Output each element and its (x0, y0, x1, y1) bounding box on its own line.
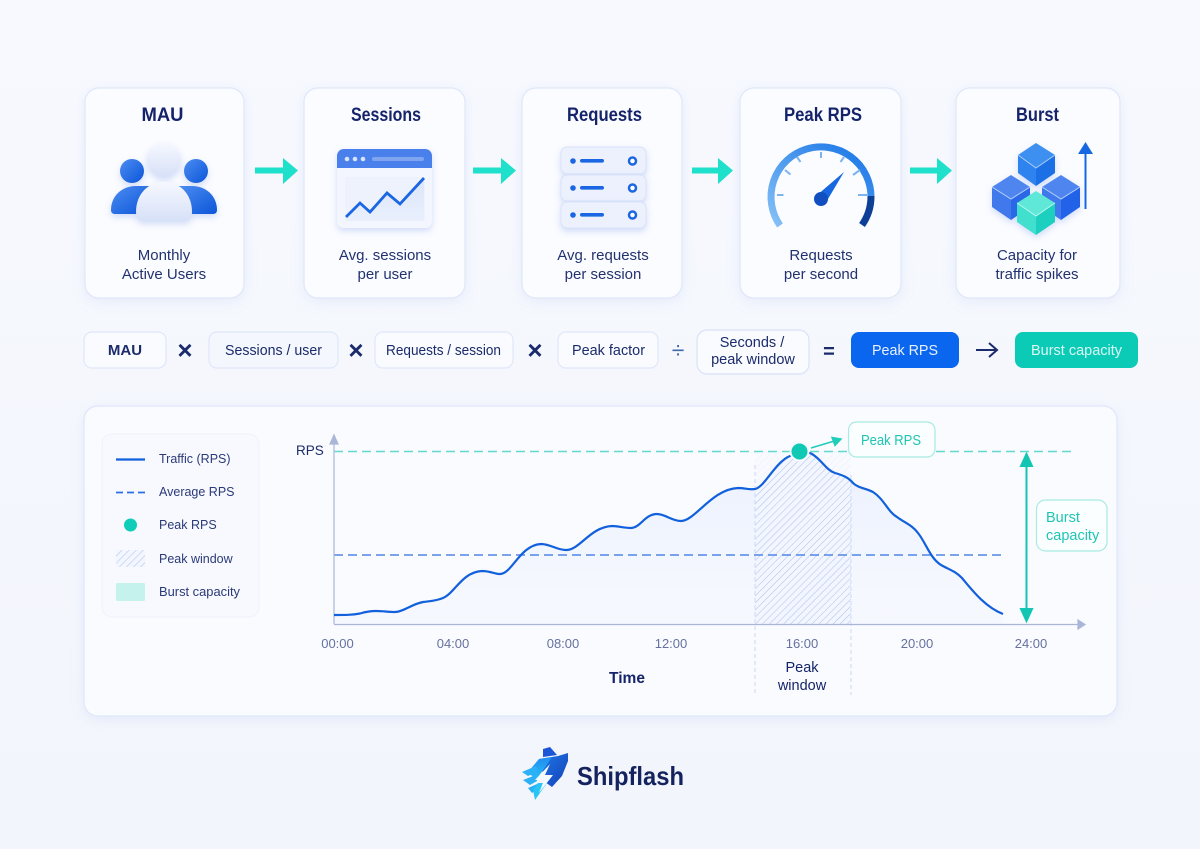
arrow: peak RPS to burst (910, 158, 952, 184)
chart: traffic over time (296, 422, 1107, 695)
legend (102, 434, 259, 617)
pill: burst capacity result: Burst capacity (1031, 342, 1122, 359)
callout: burst capacity: capacity (1046, 528, 1100, 544)
x tick labels: 20:00 (901, 636, 933, 651)
pill: burst capacity result (1015, 332, 1138, 368)
callout: peak RPS (848, 422, 935, 457)
arrow: peak to callout (811, 438, 841, 448)
operator: times: × (527, 335, 543, 365)
panel: MAU card (85, 88, 244, 298)
x tick labels: 16:00 (786, 636, 818, 651)
icon: browser chart (337, 149, 432, 228)
caption: requests per second: per second (784, 266, 858, 283)
legend item: peak window (116, 550, 234, 567)
legend item: average: Average RPS (159, 485, 235, 499)
pill: MAU (84, 332, 166, 368)
x tick labels: 04:00 (437, 636, 469, 651)
callout: burst capacity (1036, 500, 1107, 551)
icon: speed gauge (771, 147, 871, 226)
caption: capacity for traffic spikes: Capacity for (997, 247, 1077, 264)
peak window boundaries (755, 465, 851, 695)
area under curve (334, 452, 1003, 624)
x tick labels (321, 636, 1047, 651)
operator: divide: ÷ (672, 337, 684, 363)
pill: requests per session (375, 332, 513, 368)
panel: sessions card (304, 88, 465, 298)
legend item: traffic: Traffic (RPS) (159, 452, 231, 466)
logo: Shipflash (522, 747, 684, 800)
pill: seconds per peak window (697, 330, 809, 374)
legend item: peak (124, 518, 217, 532)
legend item: traffic (116, 452, 231, 466)
pill: sessions per user (209, 332, 338, 368)
icon: upward arrow (1078, 142, 1093, 209)
arrow: MAU to sessions (255, 158, 298, 184)
operator: equals: = (823, 341, 835, 363)
peak window hatch (755, 451, 851, 624)
axis label: time: Time (609, 670, 645, 687)
caption: monthly active users: Active Users (122, 266, 206, 283)
x tick labels: 24:00 (1015, 636, 1047, 651)
x tick labels: 12:00 (655, 636, 687, 651)
heading: requests: Requests (567, 105, 642, 126)
x axis (334, 620, 1085, 629)
heading: sessions: Sessions (351, 105, 421, 126)
x tick labels: 00:00 (321, 636, 354, 651)
legend item: average (116, 485, 235, 499)
heading: peak RPS: Peak RPS (784, 105, 862, 126)
operator: times: × (348, 335, 364, 365)
heading: burst: Burst (1016, 105, 1060, 126)
x tick labels: 08:00 (547, 636, 579, 651)
y axis (330, 435, 338, 624)
arrow: to burst capacity (976, 343, 997, 357)
pill: seconds per peak window: peak window (711, 352, 795, 368)
heading: MAU: MAU (142, 105, 184, 126)
logo mark: ship with lightning bolt (522, 747, 568, 800)
callout: peak RPS: Peak RPS (861, 432, 921, 449)
caption: requests per second: Requests (789, 247, 853, 264)
legend item: burst capacity: Burst capacity (159, 585, 241, 599)
legend item: peak: Peak RPS (159, 518, 217, 532)
axis label: RPS: RPS (296, 443, 324, 458)
caption: average sessions per user: Avg. sessions (339, 247, 431, 264)
formula row (84, 330, 1138, 374)
pill: requests per session: Requests / session (386, 343, 501, 359)
annotation: peak window: window (777, 678, 827, 694)
arrow: burst capacity range (1021, 454, 1032, 621)
caption: capacity for traffic spikes: traffic spikes (995, 266, 1079, 283)
pill: sessions per user: Sessions / user (225, 343, 322, 359)
icon: server stack (561, 147, 646, 228)
caption: average requests per session: Avg. requests (557, 247, 649, 264)
pill: peak RPS result: Peak RPS (872, 342, 938, 359)
pill: MAU: MAU (108, 342, 142, 359)
icon: users group (111, 143, 217, 221)
legend item: burst capacity (116, 583, 241, 601)
annotation: peak window: Peak (785, 660, 819, 676)
traffic line (334, 452, 1003, 615)
panel: requests card (522, 88, 682, 298)
legend item: peak window: Peak window (159, 552, 234, 566)
caption: monthly active users: Monthly (138, 247, 191, 264)
pill: peak RPS result (851, 332, 959, 368)
pill: peak factor: Peak factor (572, 343, 645, 359)
average level line (334, 554, 1005, 556)
operator: times: × (177, 335, 193, 365)
pill: peak factor (558, 332, 658, 368)
peak marker (790, 442, 808, 460)
wordmark: Shipflash (577, 761, 684, 791)
peak level line (334, 450, 1073, 452)
pill: seconds per peak window: Seconds / (720, 335, 785, 351)
caption: average requests per session: per session (565, 266, 641, 283)
icon: scaling cubes (992, 143, 1080, 235)
panel: burst card (956, 88, 1120, 298)
panel: peak RPS card (740, 88, 901, 298)
arrow: sessions to requests (473, 158, 516, 184)
arrow: requests to peak RPS (692, 158, 733, 184)
caption: average sessions per user: per user (357, 266, 413, 283)
panel: traffic chart (84, 406, 1117, 716)
callout: burst capacity: Burst (1046, 510, 1080, 526)
